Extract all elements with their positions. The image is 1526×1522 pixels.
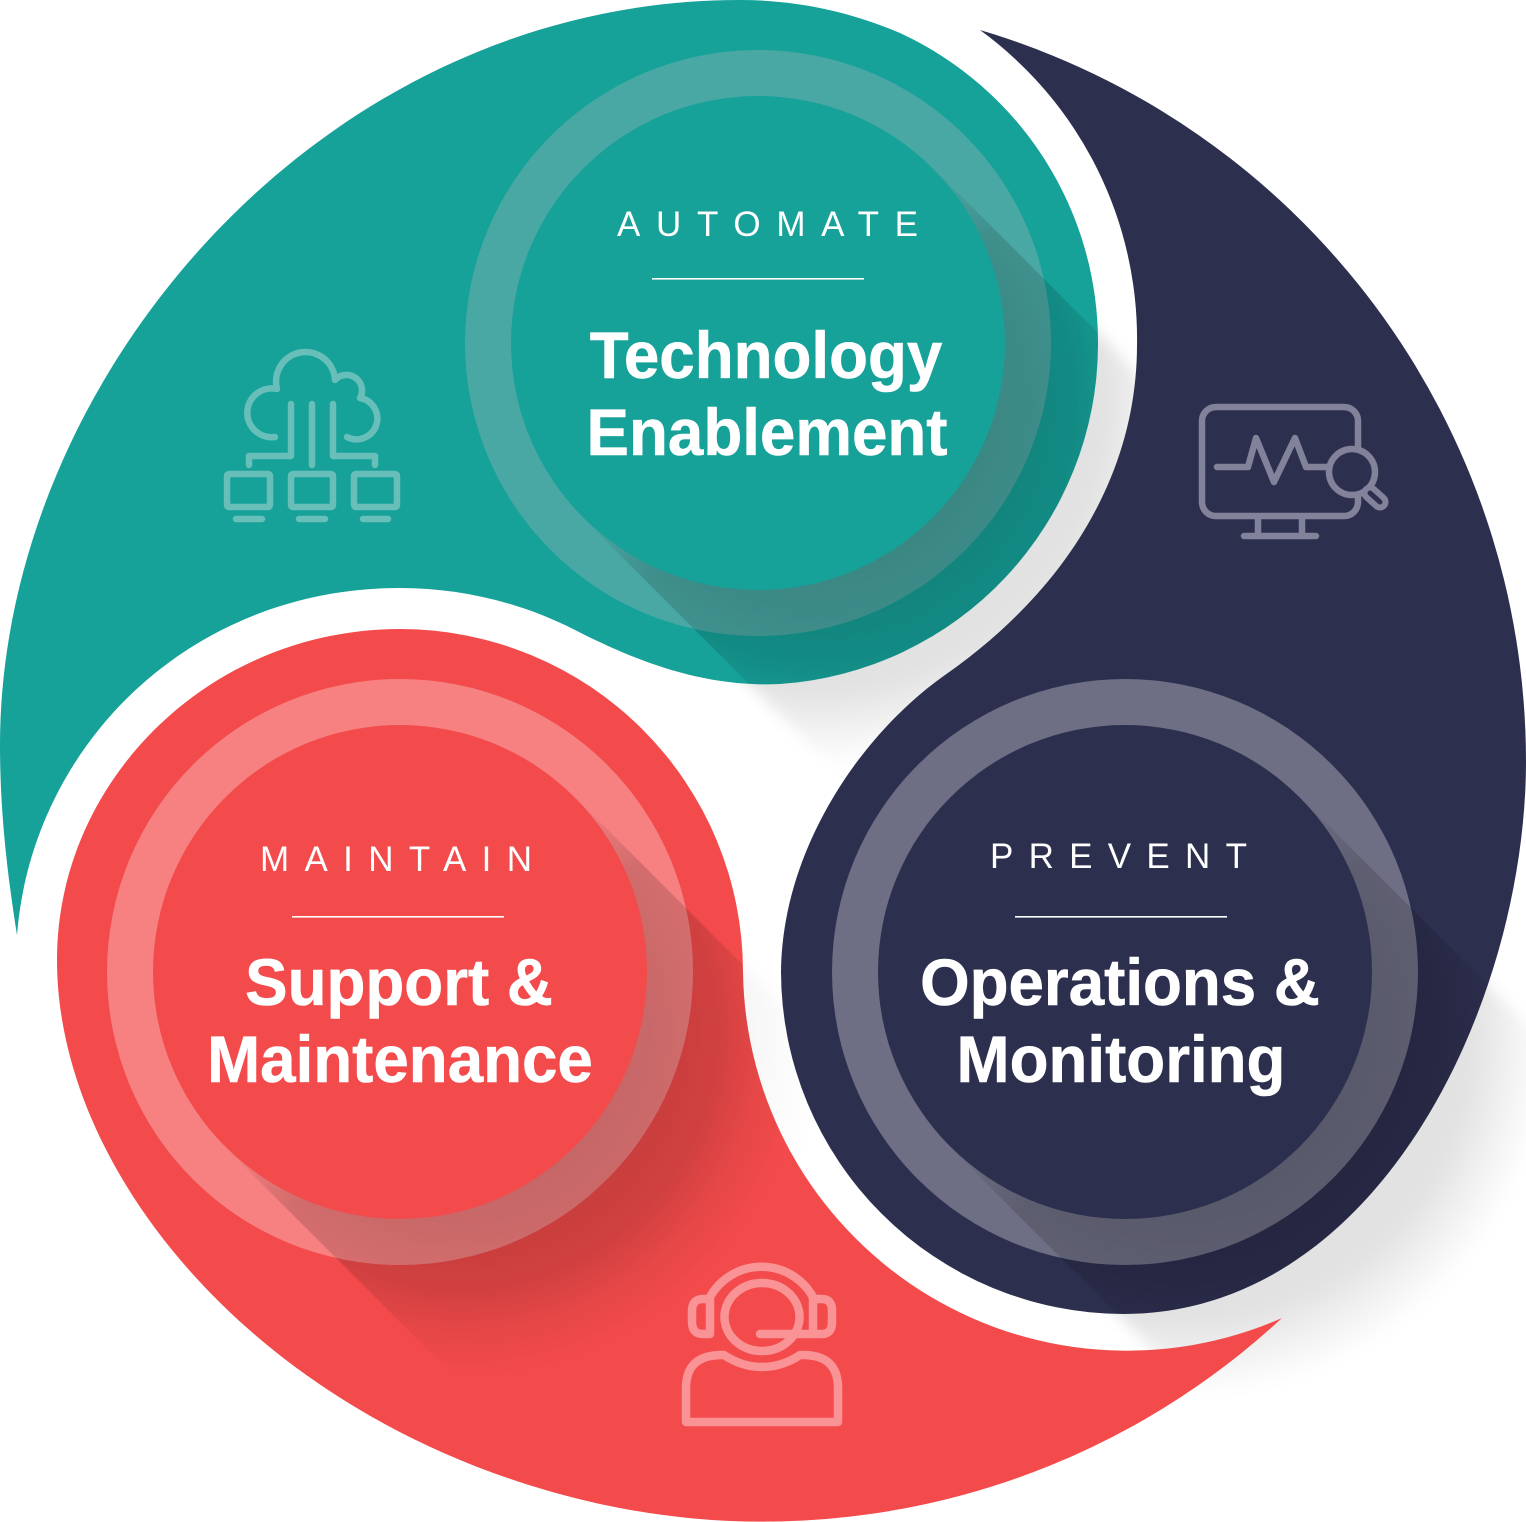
ring: maintain (107, 679, 693, 1265)
panel: prevent shape (781, 30, 1526, 1314)
panel: maintain shape (57, 629, 1282, 1522)
shadows on background (225, 168, 1526, 1522)
text block: automate (587, 205, 947, 469)
text block: maintain (207, 840, 593, 1096)
heading: Technology Enablement (587, 318, 947, 469)
heading: Support & Maintenance (207, 945, 593, 1096)
heading: Operations & Monitoring: Monitoring (957, 1022, 1285, 1096)
text block: prevent (920, 837, 1320, 1096)
heading: Operations & Monitoring (920, 945, 1320, 1096)
long shadow: automate (606, 191, 1098, 684)
inner disc: prevent (878, 725, 1372, 1219)
icon: headset agent (686, 1267, 838, 1422)
heading: Support & Maintenance: Support & (245, 945, 553, 1019)
inner disc: automate (511, 96, 1005, 590)
panel: automate shape (0, 0, 1098, 935)
divider: maintain (292, 916, 504, 918)
long shadow: prevent (978, 825, 1463, 1312)
heading: Technology Enablement: Technology (590, 318, 942, 392)
divider: prevent (1015, 916, 1227, 918)
label: AUTOMATE: AUTOMATE (617, 205, 918, 244)
heading: Support & Maintenance: Maintenance (207, 1022, 593, 1096)
heading: Operations & Monitoring: Operations & (920, 945, 1320, 1019)
inner disc: maintain (153, 725, 647, 1219)
icon: monitor with magnifier (1202, 407, 1380, 536)
icon: cloud network (227, 352, 397, 519)
ring: automate (465, 50, 1051, 636)
label: MAINTAIN: MAINTAIN (260, 840, 532, 879)
long shadow: maintain (241, 813, 768, 1347)
ring: prevent (832, 679, 1418, 1265)
divider: automate (652, 278, 864, 280)
label: PREVENT: PREVENT (990, 837, 1247, 876)
heading: Technology Enablement: Enablement (587, 395, 947, 469)
